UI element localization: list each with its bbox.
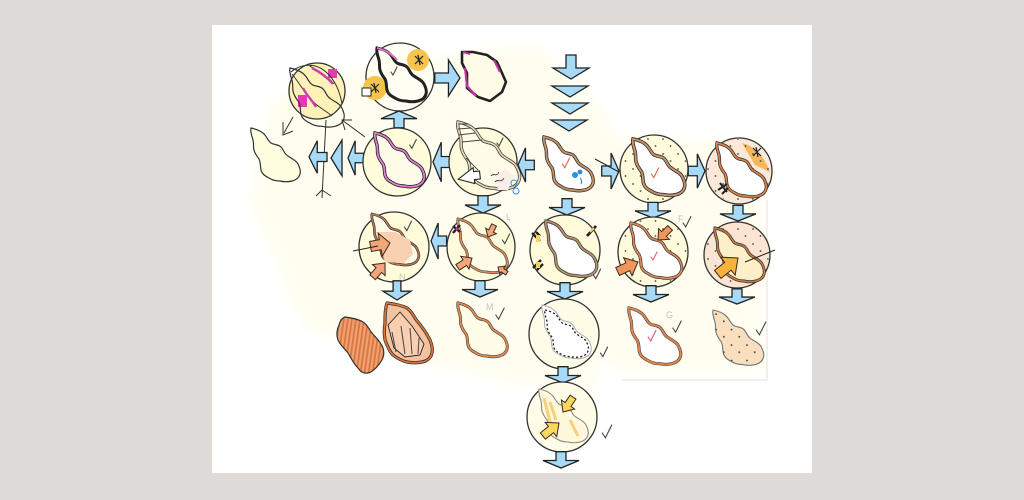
orange hatched blob (337, 317, 384, 373)
circle B: shell with dark outline and orange marks (362, 43, 434, 111)
central shell with red check and blue mark (544, 137, 593, 191)
crossed right arrow to E (595, 153, 619, 189)
shell: magenta highlights (463, 52, 500, 96)
orange sliced shell (384, 303, 432, 363)
orange outline shell with check (629, 308, 681, 364)
down arrow below M (543, 452, 579, 468)
circle G: orange arrows and shading (353, 212, 429, 283)
faint letter labels: N (399, 272, 406, 282)
circle L: dashed shell (529, 299, 608, 369)
faint letter labels: M (486, 302, 494, 312)
faint letter labels: F (678, 214, 684, 224)
orange outline shell (458, 303, 507, 357)
down arrow below D (465, 196, 501, 213)
white sheet panel (212, 25, 812, 473)
down arrow below K (719, 289, 755, 304)
pale yellow pencil shading (250, 44, 762, 392)
right arrow to F (688, 154, 705, 188)
shell: dark and magenta outline (462, 52, 506, 101)
down arrow below F (720, 205, 756, 221)
circle J: dotted with orange arrows (613, 216, 691, 287)
down arrow below L (545, 367, 581, 383)
arrow up to B (381, 111, 417, 128)
triangle 1 (552, 86, 588, 97)
circle A: pink shell with sectional lines (289, 63, 345, 198)
peach dotted shell with check (713, 310, 766, 365)
open thin arrow to bare shell (283, 117, 293, 135)
circle H: orange arrows (447, 213, 515, 281)
thin arrow to A (342, 120, 365, 137)
bare shell, pale yellow (251, 128, 300, 182)
circle I: shell with insect marks (530, 215, 601, 285)
circle F: peach dotted with orange mark (706, 138, 772, 204)
triangle 3 (551, 120, 587, 131)
down arrow below J (633, 286, 669, 302)
left arrow row 2, first (309, 141, 327, 173)
down arrow below E (635, 202, 671, 218)
left arrow row 2, second (348, 141, 364, 175)
left arrow to D (518, 148, 534, 182)
down arrow below G (383, 281, 411, 300)
faint letter labels (399, 212, 684, 320)
circle E: dotted (620, 135, 688, 203)
triangle 2 (552, 103, 588, 114)
faint letter labels: G (666, 310, 673, 320)
down arrow below H (462, 281, 498, 297)
circle K: peach dotted with yellow arrow (704, 222, 775, 288)
faint letter labels: L (506, 212, 511, 222)
circle C: pink shell (363, 128, 431, 196)
top vertical arrow (553, 55, 589, 79)
down arrow below central shell (549, 199, 585, 215)
faint page edge lines (622, 200, 767, 380)
left arrow to C (433, 142, 451, 182)
diagram (251, 43, 775, 468)
left arrow to G (431, 223, 447, 259)
down arrow below I (547, 283, 583, 299)
circle D: shell with spire (449, 122, 520, 196)
arrow right from B (435, 60, 460, 96)
left triangle row 2 (331, 140, 342, 176)
circle M: yellow arrows (527, 382, 612, 452)
check beside orange shell (496, 308, 504, 319)
